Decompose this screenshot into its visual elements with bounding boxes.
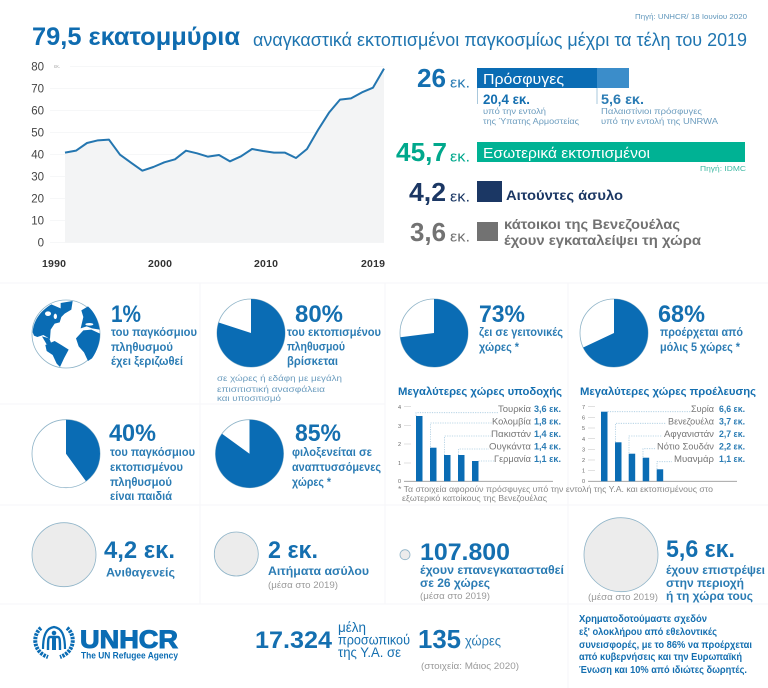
line chart: displaced population 1990-2019: 50: [31, 128, 44, 140]
bar chart: top countries of origin: Μυανμάρ: [674, 454, 715, 465]
bar chart: top countries of origin: 1,1 εκ.: [719, 454, 745, 465]
bar chart: top countries of origin: 5: [582, 426, 585, 432]
bar chart: top countries of origin: [580, 386, 756, 485]
staff count: 17.324: [255, 627, 333, 654]
staff count: μέλη: [338, 620, 366, 635]
bar chart: top host countries: 1,8 εκ.: [534, 416, 561, 428]
panel: returned 5.6 million: στην περιοχή: [666, 578, 744, 590]
staff count: της Υ.Α. σε: [338, 645, 401, 660]
bar chart: top countries of origin: Συρία: [691, 404, 714, 415]
panel: resettled 107.800: 107.800: [420, 539, 510, 566]
funding note: Ένωση και 10% από ιδιώτες δωρητές.: [579, 664, 747, 676]
panel: 40 percent children: [32, 420, 195, 503]
panel: returned 5.6 million: (μέσα στο 2019): [588, 592, 658, 602]
icon: UNHCR emblem: [35, 627, 73, 657]
logo: UNHCR: [35, 626, 178, 661]
panel: 68 percent from five countries: προέρχεται από: [660, 327, 743, 339]
bar chart: top host countries: Γερμανία: [494, 454, 531, 465]
panel: internally displaced 45.7 million: εκ.: [450, 148, 470, 166]
panel: 80 percent food insecurity: και υποσιτισμό: [217, 393, 281, 403]
bar chart: top countries of origin: 0: [582, 479, 585, 485]
panel: 73 percent neighbouring countries: ζει σε γειτονικές: [479, 327, 563, 339]
funding note: από κυβερνήσεις και την Ευρωπαϊκή: [579, 651, 742, 663]
line chart: displaced population 1990-2019: 0: [38, 238, 44, 250]
panel: 80 percent food insecurity: πληθυσμού: [287, 342, 345, 354]
panel: resettled 107.800: έχουν επανεγκατασταθεί: [420, 565, 564, 577]
panel: 73 percent neighbouring countries: [400, 299, 563, 367]
panel: 80 percent food insecurity: [217, 299, 381, 403]
title: [32, 23, 747, 51]
footnote: εξωτερικό κατοίκους της Βενεζουέλας: [402, 493, 547, 503]
panel: 85 percent developing countries: αναπτυσσόμενες: [292, 462, 381, 474]
panel: 40 percent children: είναι παιδιά: [110, 491, 172, 503]
funding note: εξ' ολοκλήρου από εθελοντικές: [579, 626, 717, 638]
bar chart: top host countries: [398, 386, 562, 485]
panel: 68 percent from five countries: μόλις 5 χώρες *: [660, 342, 740, 354]
icon: globe: [32, 300, 100, 368]
bar chart: top countries of origin: 6,6 εκ.: [719, 404, 745, 415]
panel: 40 percent children: πληθυσμού: [110, 477, 172, 489]
panel: asylum claims 2 million: 2 εκ.: [268, 537, 318, 564]
line chart: displaced population 1990-2019: 70: [31, 84, 44, 96]
staff count: [255, 620, 410, 660]
bar chart: top host countries: 1: [398, 461, 401, 467]
line chart: displaced population 1990-2019: 80: [31, 62, 44, 74]
bar chart: top host countries: 3,6 εκ.: [534, 404, 561, 415]
panel: Venezuelans 3.6 million: κάτοικοι της Βενεζουέλας: [504, 216, 680, 232]
panel: stateless 4.2 million: 4,2 εκ.: [104, 537, 175, 564]
panel: refugees 26 million: της Ύπατης Αρμοστείας: [483, 116, 579, 126]
bar chart: top host countries: 1,4 εκ.: [534, 429, 561, 440]
source note: Πηγή: UNHCR/ 18 Ιουνίου 2020: [635, 12, 747, 21]
bar chart: top countries of origin: 4: [582, 437, 585, 443]
panel: stateless 4.2 million: Ανιθαγενείς: [106, 568, 175, 580]
bar chart: top countries of origin: Βενεζουέλα: [668, 416, 714, 428]
panel: 40 percent children: του παγκόσμιου: [110, 447, 195, 459]
panel: internally displaced 45.7 million: Εσωτερικά εκτοπισμένοι: [483, 145, 650, 162]
bar chart: top host countries: 2: [398, 442, 401, 448]
panel: resettled 107.800: (μέσα στο 2019): [420, 591, 490, 601]
pie chart: 40 percent: [32, 420, 100, 488]
panel: asylum claims 2 million: (μέσα στο 2019): [268, 580, 338, 590]
countries count: (στοιχεία: Μάιος 2020): [421, 661, 519, 671]
bar chart: top countries of origin: Νότιο Σουδάν: [657, 442, 714, 452]
panel: internally displaced 45.7 million: [396, 137, 746, 173]
panel: 80 percent food insecurity: 80%: [295, 301, 343, 328]
panel: refugees 26 million: Πρόσφυγες: [483, 71, 564, 88]
title: αναγκαστικά εκτοπισμένοι παγκοσμίως μέχρι τα τέλη του 2019: [253, 30, 747, 50]
staff count: προσωπικού: [338, 632, 410, 648]
panel: refugees 26 million: 20,4 εκ.: [483, 91, 530, 107]
bar chart: top host countries: Μεγαλύτερες χώρες υποδοχής: [398, 386, 562, 398]
title: 79,5 εκατομμύρια: [32, 23, 241, 51]
panel: stateless 4.2 million: [32, 523, 175, 587]
line chart: displaced population 1990-2019: 60: [31, 106, 44, 118]
panel: returned 5.6 million: 5,6 εκ.: [666, 536, 735, 563]
panel: Venezuelans 3.6 million: 3,6: [410, 217, 446, 247]
logo: UNHCR: The UN Refugee Agency: [81, 651, 178, 661]
pie chart: 73 percent: [400, 299, 468, 367]
panel: internally displaced 45.7 million: 45,7: [396, 137, 447, 167]
bar chart: top countries of origin: 6: [582, 416, 585, 422]
bar chart: top host countries: Κολομβία: [492, 416, 531, 428]
countries count: χώρες: [465, 634, 501, 649]
bar chart: top host countries: 1,4 εκ.: [534, 442, 561, 452]
panel: resettled 107.800: [400, 539, 564, 601]
panel: 80 percent food insecurity: βρίσκεται: [287, 356, 338, 368]
panel: 68 percent from five countries: 68%: [658, 301, 705, 328]
panel: 85 percent developing countries: 85%: [295, 420, 341, 447]
line chart: displaced population 1990-2019: 2019: [361, 258, 385, 270]
line chart: displaced population 1990-2019: 30: [31, 172, 44, 184]
panel: 80 percent food insecurity: επισιτιστική ανασφάλεια: [217, 384, 325, 394]
bar chart: top countries of origin: 7: [582, 405, 585, 411]
panel: 85 percent developing countries: χώρες *: [292, 477, 331, 489]
panel: refugees 26 million: υπό την εντολή: [483, 106, 546, 116]
panel: 1 percent uprooted: [32, 300, 197, 368]
line chart: displaced population 1990-2019: εκ.: [54, 64, 60, 70]
line chart: displaced population 1990-2019: 40: [31, 150, 44, 162]
bar chart: top countries of origin: 2,7 εκ.: [719, 429, 745, 440]
panel: 73 percent neighbouring countries: 73%: [479, 301, 525, 328]
countries count: 135: [418, 624, 461, 654]
line chart: displaced population 1990-2019: 20: [31, 194, 44, 206]
panel: Venezuelans 3.6 million: εκ.: [450, 228, 470, 246]
panel: 85 percent developing countries: [215, 420, 381, 489]
panel: 40 percent children: εκτοπισμένου: [110, 462, 183, 474]
bar chart: top host countries: Ουγκάντα: [489, 442, 532, 452]
line chart: displaced population 1990-2019: 2000: [148, 258, 172, 270]
panel: resettled 107.800: σε 26 χώρες: [420, 578, 490, 590]
countries count: [418, 624, 519, 671]
bar chart: top countries of origin: 3: [582, 448, 585, 454]
pie chart: 68 percent: [580, 299, 648, 367]
panel: asylum seekers 4.2 million: εκ.: [450, 188, 470, 206]
bar chart: top host countries: 4: [398, 405, 401, 411]
panel: 1 percent uprooted: 1%: [111, 301, 141, 328]
pie chart: 80 percent: [217, 299, 285, 367]
bar chart: top countries of origin: 3,7 εκ.: [719, 416, 745, 428]
panel: 40 percent children: 40%: [109, 420, 156, 447]
footnote: [398, 484, 713, 503]
panel: 68 percent from five countries: [580, 299, 743, 367]
panel: Venezuelans 3.6 million: έχουν εγκαταλείψει τη χώρα: [504, 232, 701, 248]
line chart: displaced population 1990-2019: 10: [31, 216, 44, 228]
footnote: * Τα στοιχεία αφορούν πρόσφυγες υπό την εντολή της Υ.Α. και εκτοπισμένους στο: [398, 484, 713, 494]
funding note: [579, 613, 752, 676]
bar chart: top host countries: Τουρκία: [498, 404, 532, 415]
panel: refugees 26 million: Παλαιστίνιοι πρόσφυγες: [601, 106, 702, 116]
bar chart: top countries of origin: Αφγανιστάν: [664, 429, 714, 440]
bar chart: top host countries: Πακιστάν: [491, 429, 531, 440]
panel: 85 percent developing countries: φιλοξενείται σε: [292, 447, 373, 459]
panel: refugees 26 million: υπό την εντολή της UNRWA: [601, 116, 718, 126]
panel: refugees 26 million: 5,6 εκ.: [601, 91, 644, 107]
panel: returned 5.6 million: [584, 518, 765, 603]
funding note: Χρηματοδοτούμαστε σχεδόν: [579, 613, 707, 625]
panel: refugees 26 million: 26: [417, 63, 446, 93]
logo: UNHCR: UNHCR: [80, 626, 178, 654]
panel: returned 5.6 million: έχουν επιστρέψει: [666, 565, 765, 577]
panel: 80 percent food insecurity: σε χώρες ή εδάφη με μεγάλη: [217, 373, 342, 383]
funding note: συνεισφορές, με το 86% να προέρχεται: [579, 639, 752, 651]
line chart: displaced population 1990-2019: 1990: [42, 258, 66, 270]
panel: asylum claims 2 million: Αιτήματα ασύλου: [268, 566, 369, 578]
panel: 80 percent food insecurity: του εκτοπισμένου: [287, 327, 381, 339]
panel: refugees 26 million: εκ.: [450, 74, 470, 92]
panel: 1 percent uprooted: έχει ξεριζωθεί: [111, 356, 183, 368]
panel: 1 percent uprooted: πληθυσμού: [111, 342, 173, 354]
panel: asylum seekers 4.2 million: [409, 177, 623, 207]
panel: refugees 26 million: [417, 63, 718, 126]
bar chart: top host countries: 3: [398, 424, 401, 430]
bar chart: top countries of origin: Μεγαλύτερες χώρες προέλευσης: [580, 386, 756, 398]
bar chart: top host countries: 0: [398, 479, 401, 485]
panel: 73 percent neighbouring countries: χώρες *: [479, 342, 519, 354]
pie chart: 85 percent: [215, 420, 284, 488]
line chart: displaced population 1990-2019: [31, 62, 385, 270]
panel: Venezuelans 3.6 million: [410, 216, 701, 248]
line chart: displaced population 1990-2019: 2010: [254, 258, 278, 270]
panel: 1 percent uprooted: του παγκόσμιου: [111, 327, 197, 339]
bar chart: top countries of origin: 2: [582, 458, 585, 464]
panel: asylum seekers 4.2 million: 4,2: [409, 177, 446, 207]
panel: asylum seekers 4.2 million: Αιτούντες άσυλο: [506, 187, 623, 203]
bar chart: top countries of origin: 2,2 εκ.: [719, 442, 745, 452]
panel: asylum claims 2 million: [214, 532, 369, 590]
bar chart: top host countries: 1,1 εκ.: [534, 454, 561, 465]
panel: internally displaced 45.7 million: Πηγή: IDMC: [700, 166, 746, 173]
bar chart: top countries of origin: 1: [582, 468, 585, 474]
panel: returned 5.6 million: ή τη χώρα τους: [666, 591, 753, 603]
